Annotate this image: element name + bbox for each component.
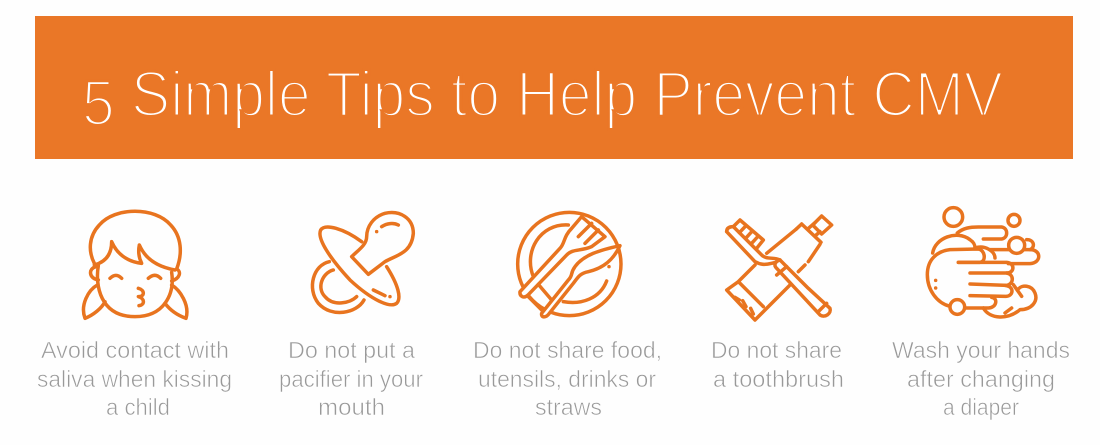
caption: toothbrush: Do not share xyxy=(711,337,842,363)
caption: toothbrush: a toothbrush xyxy=(713,366,844,392)
icon: plate with fork and knife xyxy=(518,212,621,317)
caption: utensils: Do not share food, xyxy=(473,337,662,363)
caption: utensils: utensils, drinks or xyxy=(478,366,656,392)
tip 2: pacifier xyxy=(279,213,423,420)
caption: hand washing: Wash your hands xyxy=(892,337,1070,363)
caption: kissing xyxy=(37,337,232,420)
icon: washing hands with bubbles xyxy=(927,208,1039,317)
caption: pacifier: mouth xyxy=(318,394,385,420)
caption: kissing: Avoid contact with xyxy=(41,337,229,363)
caption: kissing: a child xyxy=(106,394,170,420)
caption: kissing: saliva when kissing xyxy=(37,366,232,392)
icon: pacifier xyxy=(312,213,413,313)
caption: toothbrush xyxy=(711,337,844,392)
tip 5: hand washing xyxy=(892,208,1070,420)
icon: girl blowing a kiss xyxy=(83,211,187,318)
caption: pacifier xyxy=(279,337,423,420)
title banner xyxy=(35,16,1073,159)
tip 1: kissing xyxy=(37,211,232,420)
title: 5 xyxy=(82,67,115,139)
caption: hand washing: a diaper xyxy=(943,394,1019,420)
icon: toothbrush and toothpaste xyxy=(727,216,832,320)
title: Simple Tips to Help Prevent CMV xyxy=(115,58,1003,130)
tip 3: utensils xyxy=(473,212,662,420)
caption: hand washing: after changing xyxy=(907,366,1055,392)
caption: utensils: straws xyxy=(535,394,602,420)
caption: pacifier: Do not put a xyxy=(288,337,415,363)
caption: hand washing xyxy=(892,337,1070,420)
caption: utensils xyxy=(473,337,662,420)
tip 4: toothbrush xyxy=(711,216,844,392)
caption: pacifier: pacifier in your xyxy=(279,366,423,392)
